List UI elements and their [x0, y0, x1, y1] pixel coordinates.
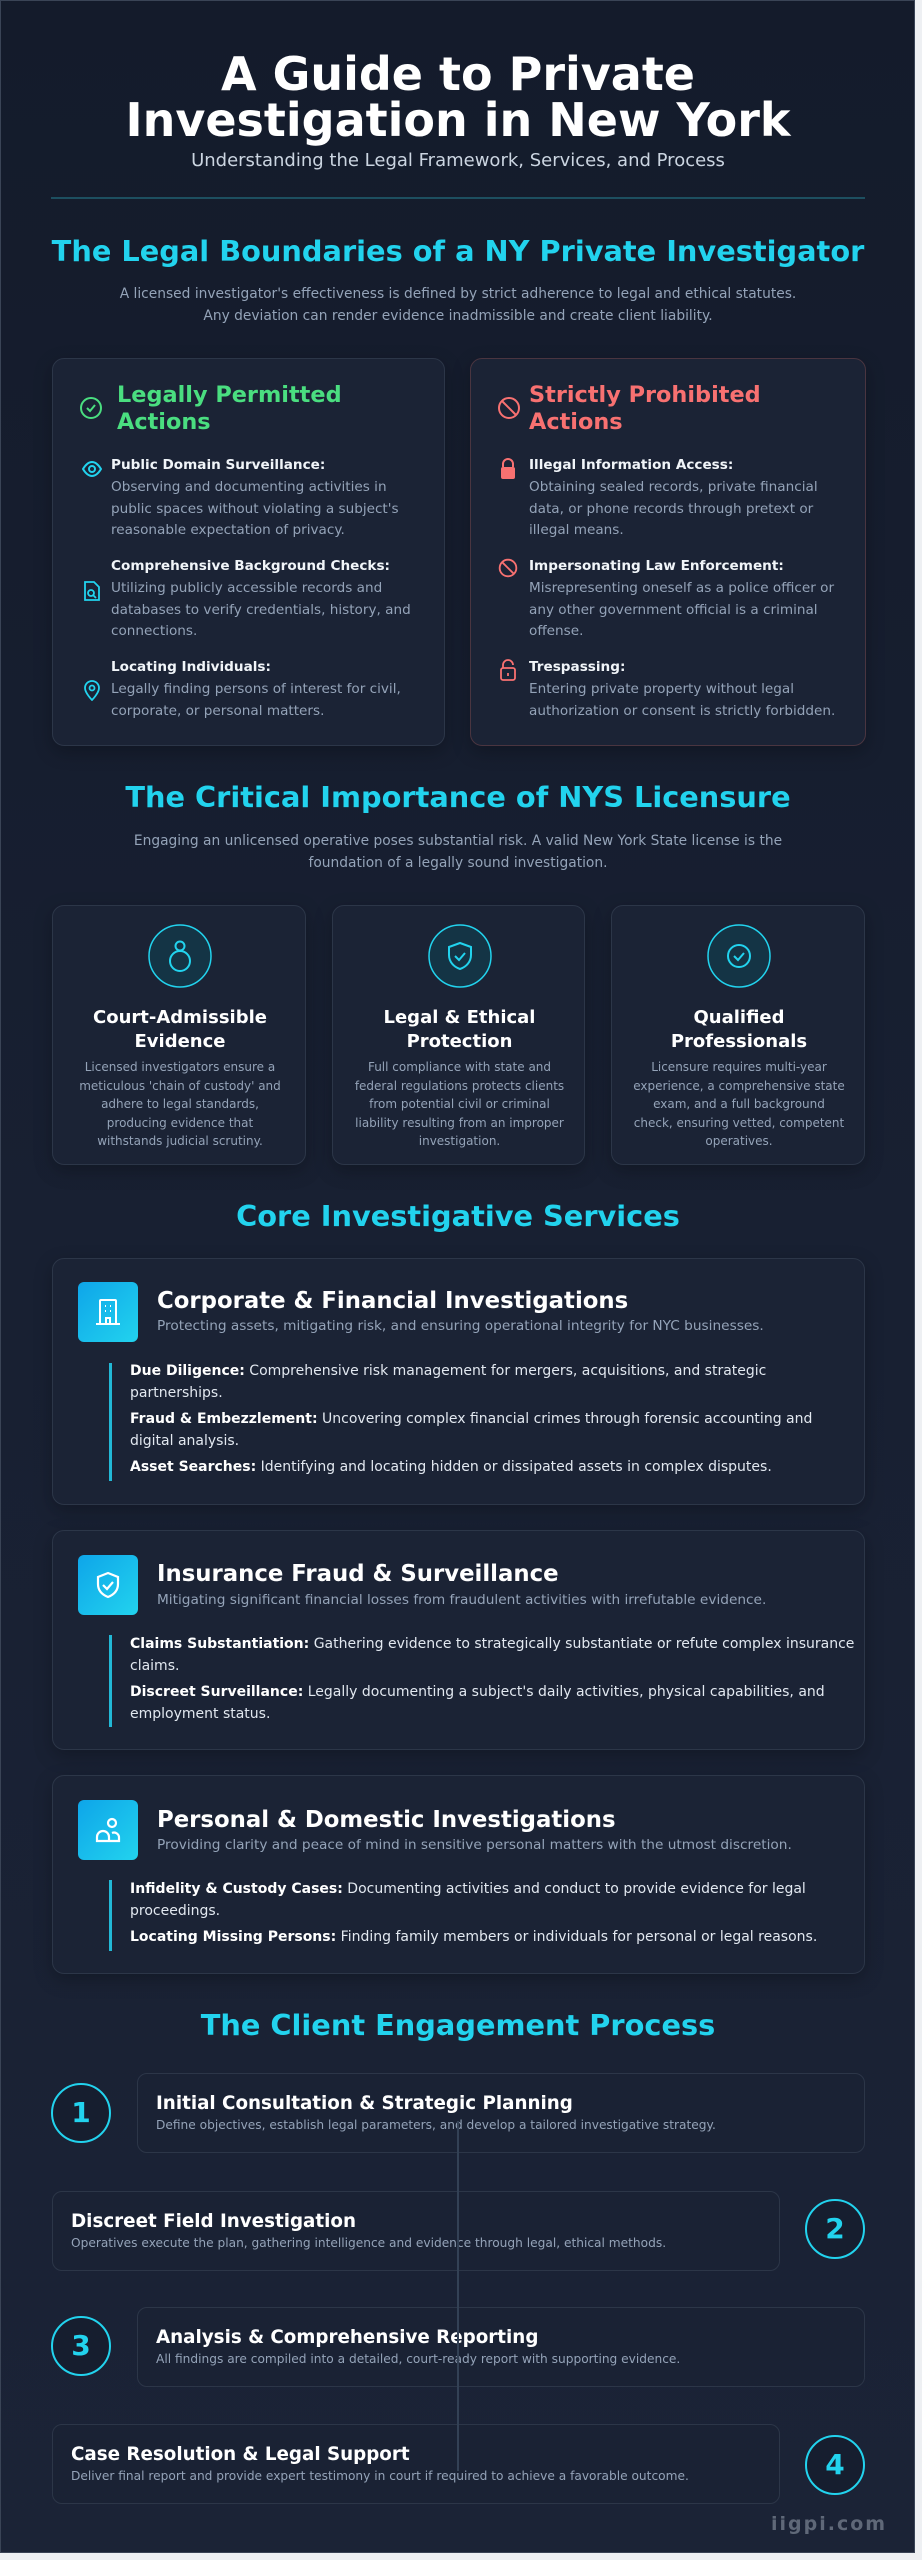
item: public domain surveillance: Public Domain Surveillance:	[111, 457, 325, 473]
heading: licensure: The Critical Importance of NYS Licensure	[125, 780, 791, 814]
intro: legal boundaries: Any deviation can render evidence inadmissible and create client liability.	[203, 308, 713, 324]
item: illegal information access: illegal means.	[529, 522, 624, 538]
text: legal & ethical: Full compliance with state and	[368, 1060, 551, 1074]
text: legal & ethical: Protection	[407, 1031, 512, 1052]
item: impersonating law enforcement: Misrepresenting oneself as a police officer or	[529, 580, 834, 596]
list: personal services: proceedings. Locating Missing Persons: Finding family members or individuals for personal or legal reasons.	[130, 1902, 817, 1945]
item: background checks: Comprehensive Background Checks:	[111, 558, 390, 574]
card: step 3: All findings are compiled into a detailed, court-ready report with supporting evidence.	[156, 2352, 680, 2366]
item: public domain surveillance: reasonable expectation of privacy.	[111, 522, 345, 538]
item: public domain surveillance	[111, 457, 399, 538]
icon: check badge	[707, 924, 771, 988]
item: impersonating law enforcement	[529, 558, 834, 639]
intro: licensure	[134, 833, 782, 871]
card: step 3: Analysis & Comprehensive Reporting	[156, 2327, 538, 2348]
item: locating individuals: corporate, or personal matters.	[111, 703, 324, 719]
item: impersonating law enforcement: any other government official is a criminal	[529, 602, 818, 618]
item: impersonating law enforcement: Impersonating Law Enforcement:	[529, 558, 784, 574]
item: illegal information access: Illegal Information Access:	[529, 457, 733, 473]
step 3	[51, 2307, 865, 2387]
text: court-admissible: withstands judicial scrutiny.	[97, 1134, 263, 1148]
item: locating individuals: Legally finding persons of interest for civil,	[111, 681, 401, 697]
icon: location pin	[84, 680, 100, 701]
text: qualified	[633, 1007, 845, 1148]
text: court-admissible: producing evidence that	[107, 1116, 253, 1130]
panel: prohibited actions	[470, 358, 866, 746]
item: trespassing: Trespassing:	[529, 659, 625, 675]
icon: person	[78, 1800, 138, 1860]
intro: legal boundaries	[120, 286, 796, 324]
number 1: 1	[71, 2096, 91, 2129]
text: qualified: exam, and a full background	[653, 1097, 825, 1111]
list: personal services	[130, 1881, 817, 1945]
panel: legal & ethical protection	[332, 905, 585, 1165]
text: qualified: Licensure requires multi-year	[651, 1060, 827, 1074]
list: personal services: Infidelity & Custody Cases: Documenting activities and conduct to provide evidence for legal	[130, 1881, 806, 1897]
heading: prohibited	[529, 382, 761, 435]
text: court-admissible	[79, 1007, 281, 1148]
item: trespassing: Entering private property without legal	[529, 681, 794, 697]
text: legal & ethical: federal regulations protects clients	[355, 1078, 564, 1092]
item: public domain surveillance: public spaces without violating a subject's	[111, 501, 399, 517]
item: background checks: databases to verify credentials, history, and	[111, 602, 411, 618]
heading: core services: Core Investigative Services	[236, 1199, 680, 1233]
text: court-admissible: meticulous 'chain of custody' and	[79, 1078, 281, 1092]
item: locating individuals: Locating Individuals:	[111, 659, 271, 675]
text: court-admissible: adhere to legal standards,	[101, 1097, 259, 1111]
number 2	[805, 2199, 865, 2259]
subtitle: corporate: Protecting assets, mitigating risk, and ensuring operational integrity for NYC businesses.	[157, 1318, 764, 1334]
item: background checks: connections.	[111, 623, 197, 639]
heading: engagement process: The Client Engagement Process	[201, 2008, 715, 2042]
panel: court-admissible evidence	[52, 905, 306, 1165]
text: court-admissible: Court-Admissible	[93, 1007, 267, 1028]
title: Investigation in New York	[126, 93, 790, 147]
text: legal & ethical: Legal & Ethical	[384, 1007, 535, 1028]
subtitle: personal: Providing clarity and peace of mind in sensitive personal matters with the utmost discretion.	[157, 1837, 792, 1853]
icon: eye	[82, 461, 102, 477]
panel: permitted actions	[52, 358, 445, 746]
panel: insurance fraud	[52, 1530, 865, 1750]
step 2	[52, 2191, 865, 2271]
item: public domain surveillance: Observing and documenting activities in	[111, 479, 387, 495]
icon: check circle	[80, 397, 102, 419]
text: legal & ethical	[355, 1007, 564, 1148]
icon: document search	[84, 581, 100, 601]
timeline line	[457, 2121, 459, 2471]
text: court-admissible: Licensed investigators ensure a	[85, 1060, 275, 1074]
icon: ban small	[498, 558, 518, 578]
number 3	[51, 2316, 111, 2376]
card: step 4: Deliver final report and provide expert testimony in court if required to achieve a favorable outcome.	[71, 2469, 689, 2483]
heading: prohibited: Actions	[529, 409, 623, 435]
icon: building	[78, 1282, 138, 1342]
card: step 1	[137, 2073, 865, 2153]
card: step 1: Define objectives, establish legal parameters, and develop a tailored investigative strategy.	[156, 2118, 716, 2132]
item: illegal information access	[529, 457, 818, 538]
number 4	[805, 2435, 865, 2495]
list: corporate services	[130, 1363, 812, 1475]
card: step 3	[137, 2307, 865, 2387]
card: step 4	[52, 2424, 780, 2504]
card: step 2: Discreet Field Investigation	[71, 2211, 356, 2232]
card: step 4: Case Resolution & Legal Support	[71, 2444, 410, 2465]
item: trespassing: authorization or consent is strictly forbidden.	[529, 703, 835, 719]
icon: ring	[148, 924, 212, 988]
list: insurance services	[130, 1636, 854, 1722]
panel: corporate & financial	[52, 1258, 865, 1505]
title: insurance: Insurance Fraud & Surveillance	[157, 1561, 559, 1587]
number 4: 4	[825, 2448, 845, 2481]
number 1	[51, 2083, 111, 2143]
list: insurance services: claims. Discreet Surveillance: Legally documenting a subject's daily activities, physical capabilities, and	[130, 1658, 825, 1700]
heading: permitted: Legally Permitted	[117, 382, 342, 408]
watermark: iigpi.com	[771, 2513, 887, 2535]
number 3: 3	[71, 2329, 91, 2362]
text: legal & ethical: investigation.	[419, 1134, 500, 1148]
text: legal & ethical: liability resulting from an improper	[355, 1116, 564, 1130]
title: personal: Personal & Domestic Investigations	[157, 1807, 616, 1833]
list: insurance services: employment status.	[130, 1706, 270, 1722]
card: step 2	[52, 2191, 780, 2271]
subtitle: insurance: Mitigating significant financial losses from fraudulent activities with irrefutable evidence.	[157, 1592, 766, 1608]
panel: qualified professionals	[611, 905, 865, 1165]
item: impersonating law enforcement: offense.	[529, 623, 583, 639]
card: step 2: Operatives execute the plan, gathering intelligence and evidence through legal, ethical methods.	[71, 2236, 666, 2250]
text: legal & ethical: from potential civil or criminal	[369, 1097, 550, 1111]
text: qualified: Professionals	[671, 1031, 807, 1052]
heading: legal boundaries: The Legal Boundaries of a NY Private Investigator	[52, 234, 864, 268]
icon: ban	[498, 397, 520, 419]
list: corporate services: partnerships. Fraud & Embezzlement: Uncovering complex financial crimes through forensic accounting and	[130, 1384, 812, 1427]
text: qualified: Qualified	[693, 1007, 785, 1028]
item: illegal information access: Obtaining sealed records, private financial	[529, 479, 818, 495]
text: court-admissible: Evidence	[134, 1031, 225, 1052]
step 1	[51, 2073, 865, 2153]
icon: shield	[428, 924, 492, 988]
title: A Guide to Private	[221, 47, 695, 101]
text: qualified: experience, a comprehensive state	[633, 1078, 845, 1092]
item: illegal information access: data, or phone records through pretext or	[529, 501, 813, 517]
title: corporate: Corporate & Financial Investigations	[157, 1288, 628, 1314]
subtitle: Understanding the Legal Framework, Services, and Process	[191, 150, 725, 171]
icon: lock	[501, 458, 515, 479]
intro: licensure: foundation of a legally sound investigation.	[308, 855, 608, 871]
item: background checks: Utilizing publicly accessible records and	[111, 580, 382, 596]
item: background checks	[111, 558, 411, 639]
list: corporate services: digital analysis. Asset Searches: Identifying and locating hidden or dissipated assets in complex disputes.	[130, 1432, 772, 1475]
list: insurance services: Claims Substantiation: Gathering evidence to strategically substantiate or refute complex insurance	[130, 1636, 854, 1652]
text: qualified: check, ensuring vetted, competent	[634, 1116, 844, 1130]
heading: permitted: Actions	[117, 409, 211, 435]
item: trespassing	[529, 659, 835, 719]
heading: permitted	[117, 382, 342, 435]
panel: personal & domestic	[52, 1775, 865, 1974]
card: step 1: Initial Consultation & Strategic Planning	[156, 2093, 573, 2114]
number 2: 2	[825, 2212, 845, 2245]
intro: licensure: Engaging an unlicensed operative poses substantial risk. A valid New York State license is the	[134, 833, 782, 849]
item: locating individuals	[111, 659, 401, 719]
intro: legal boundaries: A licensed investigator's effectiveness is defined by strict adherence to legal and ethical statutes.	[120, 286, 796, 302]
list: corporate services: Due Diligence: Comprehensive risk management for mergers, acquisitions, and strategic	[130, 1363, 766, 1379]
heading: prohibited: Strictly Prohibited	[529, 382, 761, 408]
step 4	[52, 2424, 865, 2504]
text: qualified: operatives.	[705, 1134, 773, 1148]
title	[126, 47, 792, 147]
icon: shield check	[78, 1555, 138, 1615]
icon: unlocked	[500, 659, 516, 681]
